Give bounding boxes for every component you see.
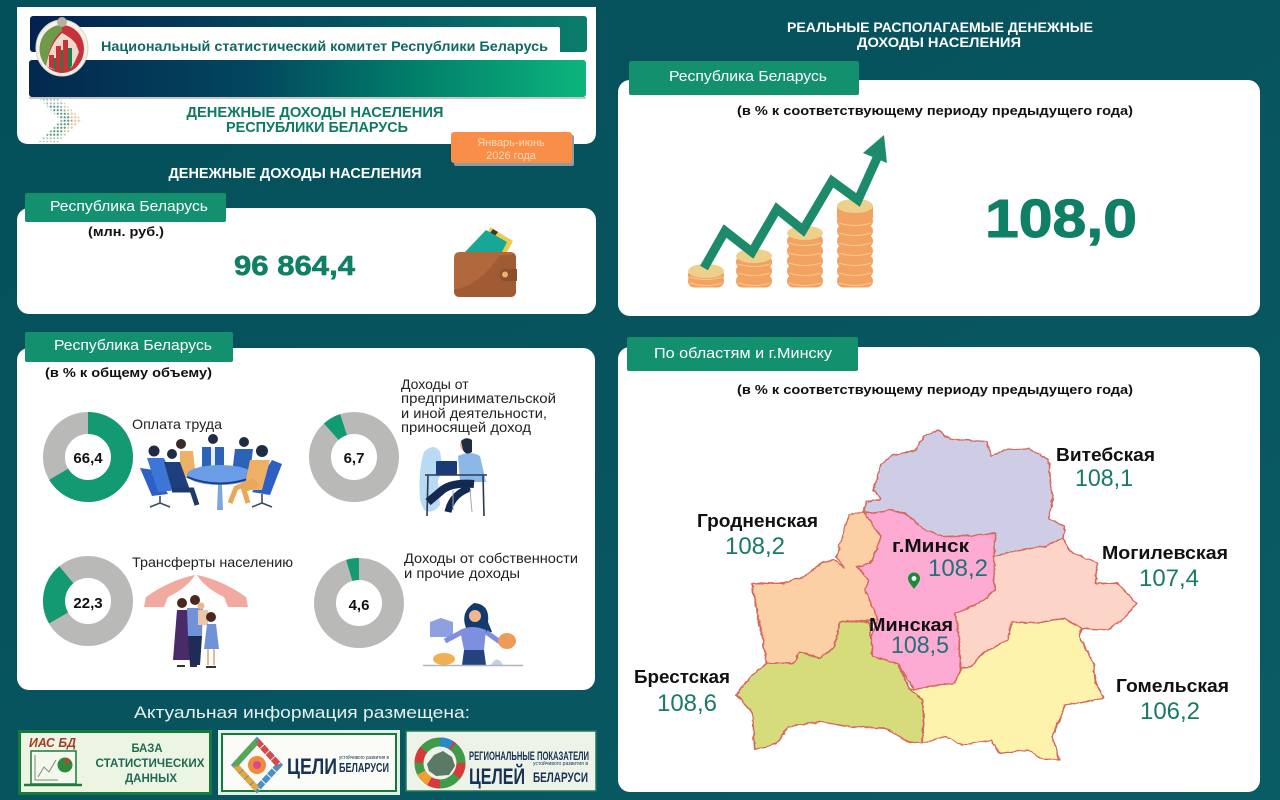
map: Belarus regions xyxy=(736,430,1136,760)
label: Minsk region xyxy=(869,615,953,659)
icon: dotted chevrons xyxy=(38,97,82,142)
label: property: и прочие доходы xyxy=(404,565,520,581)
tag: Republic of Belarus: Республика Беларусь xyxy=(50,198,208,215)
tag: by regions xyxy=(627,337,858,371)
label: wages: Оплата труда xyxy=(132,416,222,432)
label: property xyxy=(404,550,578,581)
link box: regional indicators xyxy=(406,731,596,792)
link box: SDG goals in Belarus: БЕЛАРУСИ xyxy=(339,760,389,775)
icon: family under hands xyxy=(144,575,248,667)
donut: transfers 22,3: 22,3 xyxy=(73,595,103,612)
tag: Republic of Belarus xyxy=(25,332,233,362)
header title xyxy=(186,104,444,136)
link box: SDG goals in Belarus xyxy=(218,730,400,795)
icon: SDG ring with map xyxy=(411,734,469,792)
heading: money income: ДЕНЕЖНЫЕ ДОХОДЫ НАСЕЛЕНИЯ xyxy=(168,166,422,182)
label: Grodno: 108,2 xyxy=(725,533,785,560)
header dark band top xyxy=(30,16,587,52)
donut: property 4,6 xyxy=(317,561,401,645)
panel: real income xyxy=(618,61,1260,316)
icon: Minsk city pin xyxy=(908,572,920,589)
value: real income: 108,0 xyxy=(985,189,1137,249)
tag: by regions: По областям и г.Минску xyxy=(654,345,833,362)
panel: header xyxy=(17,7,596,144)
link box: statistical database: БАЗА xyxy=(132,741,163,755)
region: Minsk xyxy=(857,510,996,690)
heading: where information is published: Актуальная информация размещена: xyxy=(134,703,470,722)
link box: regional indicators: РЕГИОНАЛЬНЫЕ ПОКАЗАТЕЛИ xyxy=(469,749,589,763)
unit label: (млн. руб.) xyxy=(88,224,164,239)
heading: real disposable income xyxy=(787,20,1093,50)
tag: Republic of Belarus xyxy=(629,61,859,95)
tag: Republic of Belarus xyxy=(25,193,226,222)
label: Gomel xyxy=(1116,676,1229,725)
label: Minsk region: 108,5 xyxy=(891,632,949,659)
icon: emblem logo xyxy=(36,17,88,76)
donut: wages 66,4: 66,4 xyxy=(73,450,103,467)
region: Brest xyxy=(736,622,924,750)
link box: statistical database: СТАТИСТИЧЕСКИХ xyxy=(96,756,204,770)
link box: SDG goals in Belarus: устойчивого развития в xyxy=(339,754,389,761)
link box: SDG goals in Belarus: ЦЕЛИ xyxy=(287,754,337,779)
icon: laptop with chart xyxy=(24,751,82,785)
header white strip with organisation name xyxy=(70,27,560,60)
label: entrepreneurship: приносящей доход xyxy=(401,419,531,435)
label: Minsk city: г.Минск xyxy=(892,536,970,556)
link box: regional indicators: ЦЕЛЕЙ xyxy=(469,764,525,789)
link box: regional indicators: устойчивого развития в xyxy=(533,760,588,767)
label: Grodno xyxy=(697,511,818,560)
region: Grodno xyxy=(751,512,881,663)
donut: wages 66,4 xyxy=(54,423,122,491)
label: Mogilev xyxy=(1102,543,1228,592)
tag: Republic of Belarus: Республика Беларусь xyxy=(54,337,212,354)
header title: РЕСПУБЛИКИ БЕЛАРУСЬ xyxy=(226,119,408,136)
panel: regions xyxy=(618,337,1260,792)
label: property: Доходы от собственности xyxy=(404,550,578,566)
badge: period: 2026 года xyxy=(486,150,537,162)
panel: income structure xyxy=(17,332,595,690)
label: Vitebsk: Витебская xyxy=(1056,445,1155,465)
icon: freelancer at desk xyxy=(420,438,487,516)
value: total income: 96 864,4 xyxy=(234,250,355,281)
label: Brest: Брестская xyxy=(634,667,730,687)
link box: statistical database: ИАС БД xyxy=(29,735,77,750)
label: entrepreneurship: Доходы от xyxy=(401,376,469,392)
label: entrepreneurship: предпринимательской xyxy=(401,390,556,406)
header white strip with organisation name: Национальный статистический комитет Республики Беларусь xyxy=(101,38,548,54)
label: Brest: 108,6 xyxy=(657,690,717,717)
region: Vitebsk xyxy=(864,430,1065,557)
link box: regional indicators: БЕЛАРУСИ xyxy=(533,769,588,785)
label: Mogilev: 107,4 xyxy=(1139,565,1199,592)
icon: wallet xyxy=(454,227,517,297)
label: Minsk city xyxy=(892,536,988,582)
label: Gomel: 106,2 xyxy=(1140,698,1200,725)
icon: woman with bank and piggy xyxy=(423,603,523,666)
tag: Republic of Belarus: Республика Беларусь xyxy=(669,68,827,85)
heading: real disposable income: ДОХОДЫ НАСЕЛЕНИЯ xyxy=(857,35,1021,50)
panel: total income xyxy=(17,193,596,314)
heading: real disposable income: РЕАЛЬНЫЕ РАСПОЛАГАЕМЫЕ ДЕНЕЖНЫЕ xyxy=(787,20,1093,35)
header title: ДЕНЕЖНЫЕ ДОХОДЫ НАСЕЛЕНИЯ xyxy=(186,104,444,121)
badge: period xyxy=(451,132,574,166)
unit label: (в % к соответствующему периоду предыдущего года) xyxy=(737,382,1133,397)
label: entrepreneurship xyxy=(401,376,556,435)
donut: property 4,6: 4,6 xyxy=(349,597,369,614)
unit label: (в % к соответствующему периоду предыдущего года) xyxy=(737,103,1133,118)
label: Brest xyxy=(634,667,730,717)
label: Grodno: Гродненская xyxy=(697,511,818,531)
label: Minsk region: Минская xyxy=(869,615,953,635)
link box: statistical database: ДАННЫХ xyxy=(125,771,177,785)
label: Vitebsk xyxy=(1056,445,1155,492)
badge: period: Январь-июнь xyxy=(477,137,545,149)
chart: coins and rising arrow xyxy=(688,135,887,288)
label: Vitebsk: 108,1 xyxy=(1075,465,1133,492)
donut: entrepreneurship 6,7: 6,7 xyxy=(344,450,364,467)
link box: statistical database xyxy=(20,732,210,794)
donut: transfers 22,3 xyxy=(42,555,134,647)
label: Minsk city: 108,2 xyxy=(928,555,988,582)
icon: business meeting xyxy=(140,434,282,510)
label: Mogilev: Могилевская xyxy=(1102,543,1228,563)
region: Gomel xyxy=(910,618,1104,760)
icon: ornament diamond xyxy=(235,741,279,789)
label: Gomel: Гомельская xyxy=(1116,676,1229,696)
label: entrepreneurship: и иной деятельности, xyxy=(401,405,547,421)
unit label: (в % к общему объему) xyxy=(45,365,212,380)
label: transfers: Трансферты населению xyxy=(132,554,293,570)
region: Mogilev xyxy=(955,538,1136,668)
donut: entrepreneurship 6,7 xyxy=(306,409,402,505)
header gradient band bottom xyxy=(29,60,586,97)
